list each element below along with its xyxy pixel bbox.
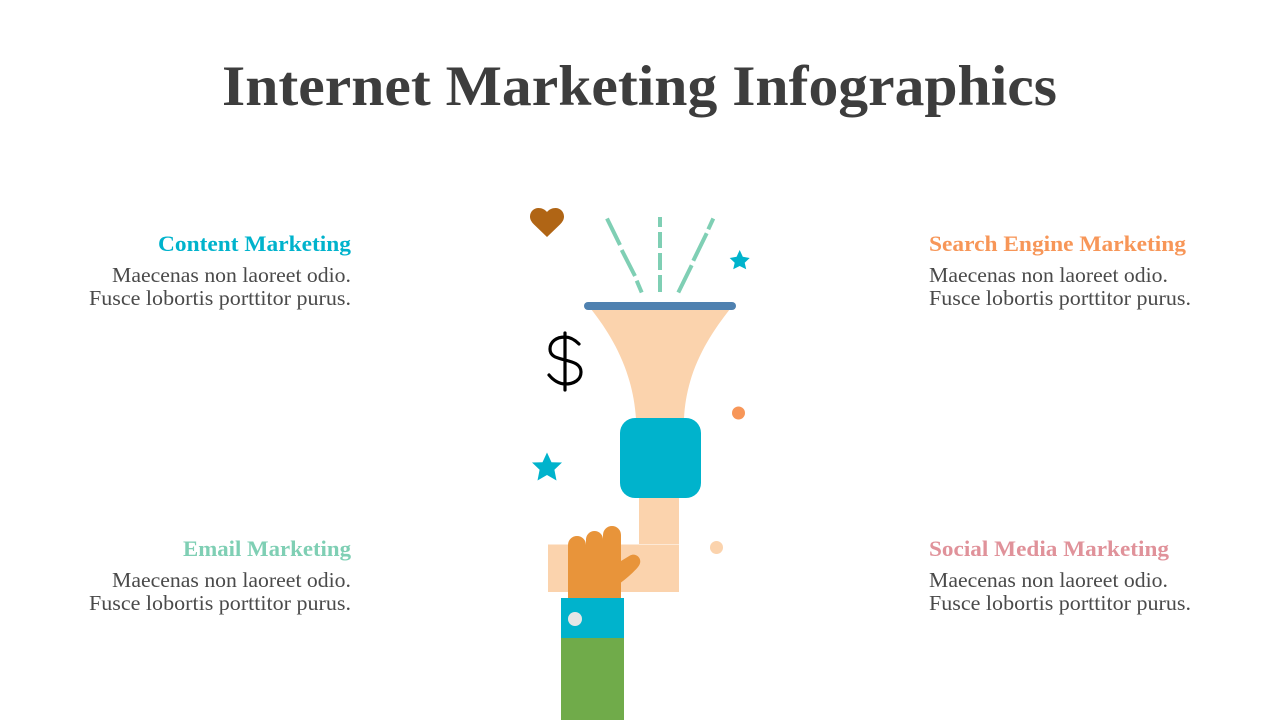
text block: email marketing: Fusce lobortis porttitor purus. — [89, 591, 351, 615]
panel: social media marketing — [929, 536, 1191, 615]
panel: search engine marketing — [929, 231, 1191, 310]
text block: search engine marketing: Fusce lobortis porttitor purus. — [929, 286, 1191, 310]
heading: content marketing: Content Marketing — [158, 231, 351, 256]
hand and arm illustration — [561, 526, 640, 720]
panel: content marketing — [89, 231, 351, 310]
icon: small star — [730, 250, 750, 269]
funnel neck — [639, 498, 679, 544]
text block: content marketing: Fusce lobortis porttitor purus. — [89, 286, 351, 310]
cuff — [561, 598, 624, 638]
text block: social media marketing: Fusce lobortis porttitor purus. — [929, 591, 1191, 615]
text block: search engine marketing — [929, 263, 1191, 310]
funnel rim — [584, 302, 736, 310]
title: Internet Marketing Infographics — [222, 55, 1057, 118]
icon: dollar sign — [549, 333, 581, 390]
text block: email marketing — [89, 568, 351, 615]
heading: social media marketing: Social Media Marketing — [929, 536, 1169, 561]
arrow: dashed rays — [607, 217, 713, 292]
funnel illustration — [548, 302, 736, 592]
text block: social media marketing: Maecenas non laoreet odio. — [929, 568, 1168, 592]
dot: peach — [710, 541, 723, 554]
panel: email marketing — [89, 536, 351, 615]
icon: large star — [532, 452, 562, 480]
text block: content marketing: Maecenas non laoreet odio. — [112, 263, 351, 287]
funnel cone — [591, 309, 730, 419]
funnel spout — [548, 544, 679, 592]
icon: heart — [530, 208, 564, 237]
text block: social media marketing — [929, 568, 1191, 615]
text block: email marketing: Maecenas non laoreet odio. — [112, 568, 351, 592]
sleeve — [561, 638, 624, 720]
heading: email marketing: Email Marketing — [183, 536, 351, 561]
cuff button — [568, 612, 582, 626]
funnel body — [620, 418, 701, 498]
hand — [568, 526, 640, 598]
text block: search engine marketing: Maecenas non laoreet odio. — [929, 263, 1168, 287]
text block: content marketing — [89, 263, 351, 310]
dot: orange — [732, 406, 745, 420]
heading: search engine marketing: Search Engine Marketing — [929, 231, 1186, 256]
